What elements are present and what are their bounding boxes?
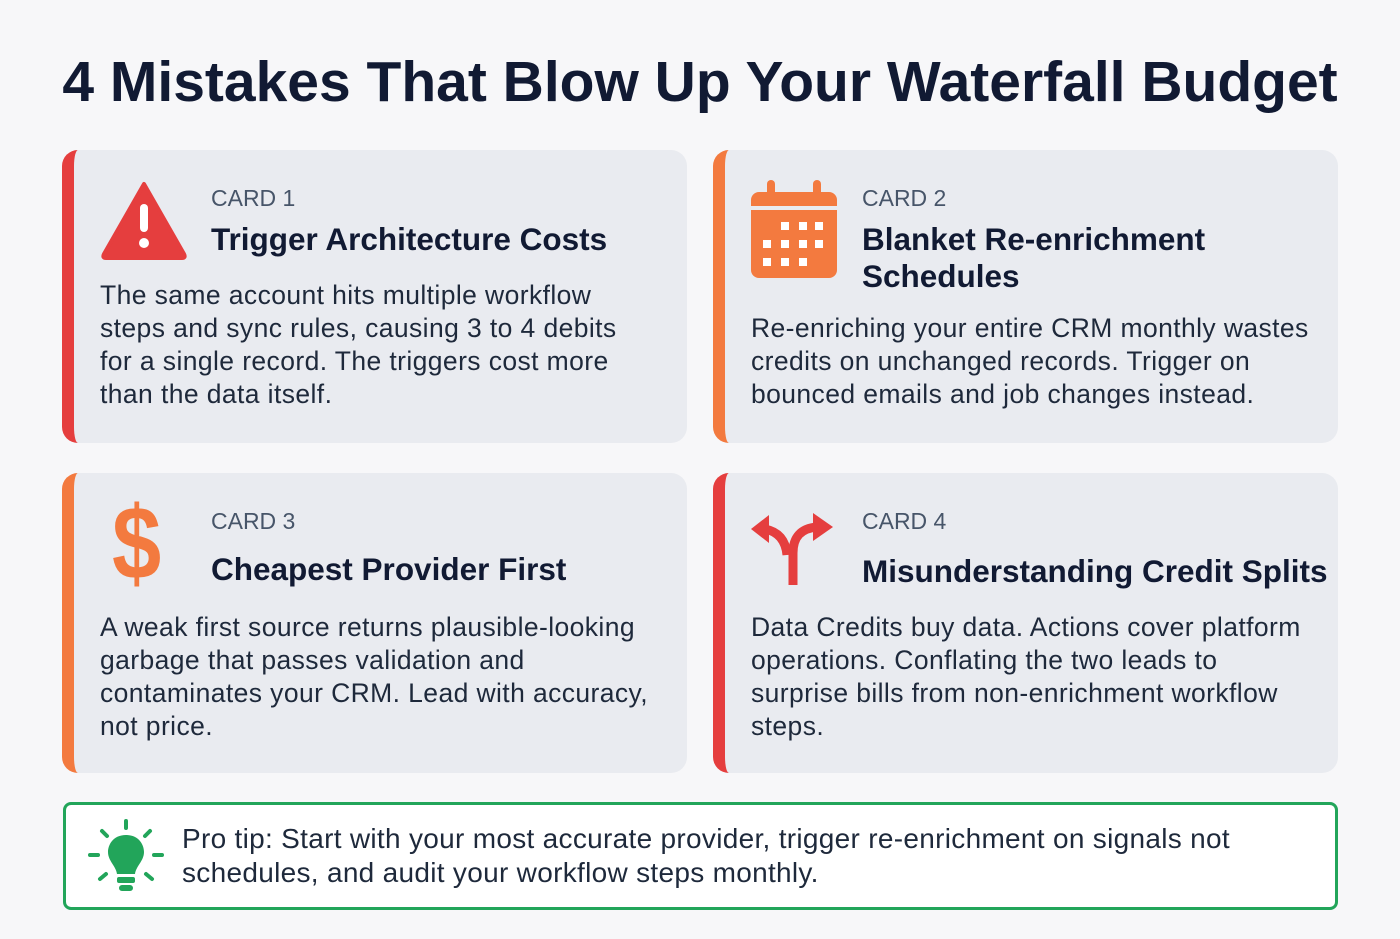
body text <box>751 612 1301 741</box>
body text: A weak first source returns plausible-looking <box>100 612 635 642</box>
body text: steps and sync rules, causing 3 to 4 debits <box>100 313 617 343</box>
body text: for a single record. The triggers cost more <box>100 346 609 376</box>
panel: card 3 <box>62 473 687 773</box>
body text: not price. <box>100 711 213 741</box>
panel: card 2 <box>713 150 1338 443</box>
tip text <box>182 823 1230 888</box>
panel: card 1 <box>62 150 687 443</box>
icon: split arrows <box>751 513 833 585</box>
heading: Misunderstanding Credit Splits <box>862 553 1328 589</box>
body text: contaminates your CRM. Lead with accuracy, <box>100 678 648 708</box>
body text: than the data itself. <box>100 379 332 409</box>
icon: lightbulb <box>88 819 164 891</box>
label: CARD 1 <box>211 185 295 211</box>
body text: Re-enriching your entire CRM monthly wastes <box>751 313 1309 343</box>
heading: Blanket Re-enrichment <box>862 221 1205 257</box>
heading: Schedules <box>862 258 1020 294</box>
label: CARD 4 <box>862 508 946 534</box>
callout: pro tip <box>63 802 1338 910</box>
body text: garbage that passes validation and <box>100 645 525 675</box>
tip text: schedules, and audit your workflow steps monthly. <box>182 857 819 888</box>
tip text: Pro tip: Start with your most accurate provider, trigger re-enrichment on signals not <box>182 823 1230 854</box>
body text: The same account hits multiple workflow <box>100 280 591 310</box>
body text: operations. Conflating the two leads to <box>751 645 1217 675</box>
icon: dollar sign: $ <box>112 486 161 602</box>
title: 4 Mistakes That Blow Up Your Waterfall Budget <box>62 50 1338 114</box>
body text <box>751 313 1309 409</box>
panel: card 4 <box>713 473 1338 773</box>
label: CARD 3 <box>211 508 295 534</box>
heading: Cheapest Provider First <box>211 551 566 587</box>
icon: calendar <box>751 180 837 278</box>
body text <box>100 280 617 409</box>
body text <box>100 612 648 741</box>
body text: bounced emails and job changes instead. <box>751 379 1254 409</box>
body text: surprise bills from non-enrichment workflow <box>751 678 1278 708</box>
heading: Trigger Architecture Costs <box>211 221 607 257</box>
icon: warning triangle <box>101 182 187 260</box>
body text: Data Credits buy data. Actions cover platform <box>751 612 1301 642</box>
body text: credits on unchanged records. Trigger on <box>751 346 1250 376</box>
heading <box>862 221 1205 294</box>
label: CARD 2 <box>862 185 946 211</box>
body text: steps. <box>751 711 824 741</box>
